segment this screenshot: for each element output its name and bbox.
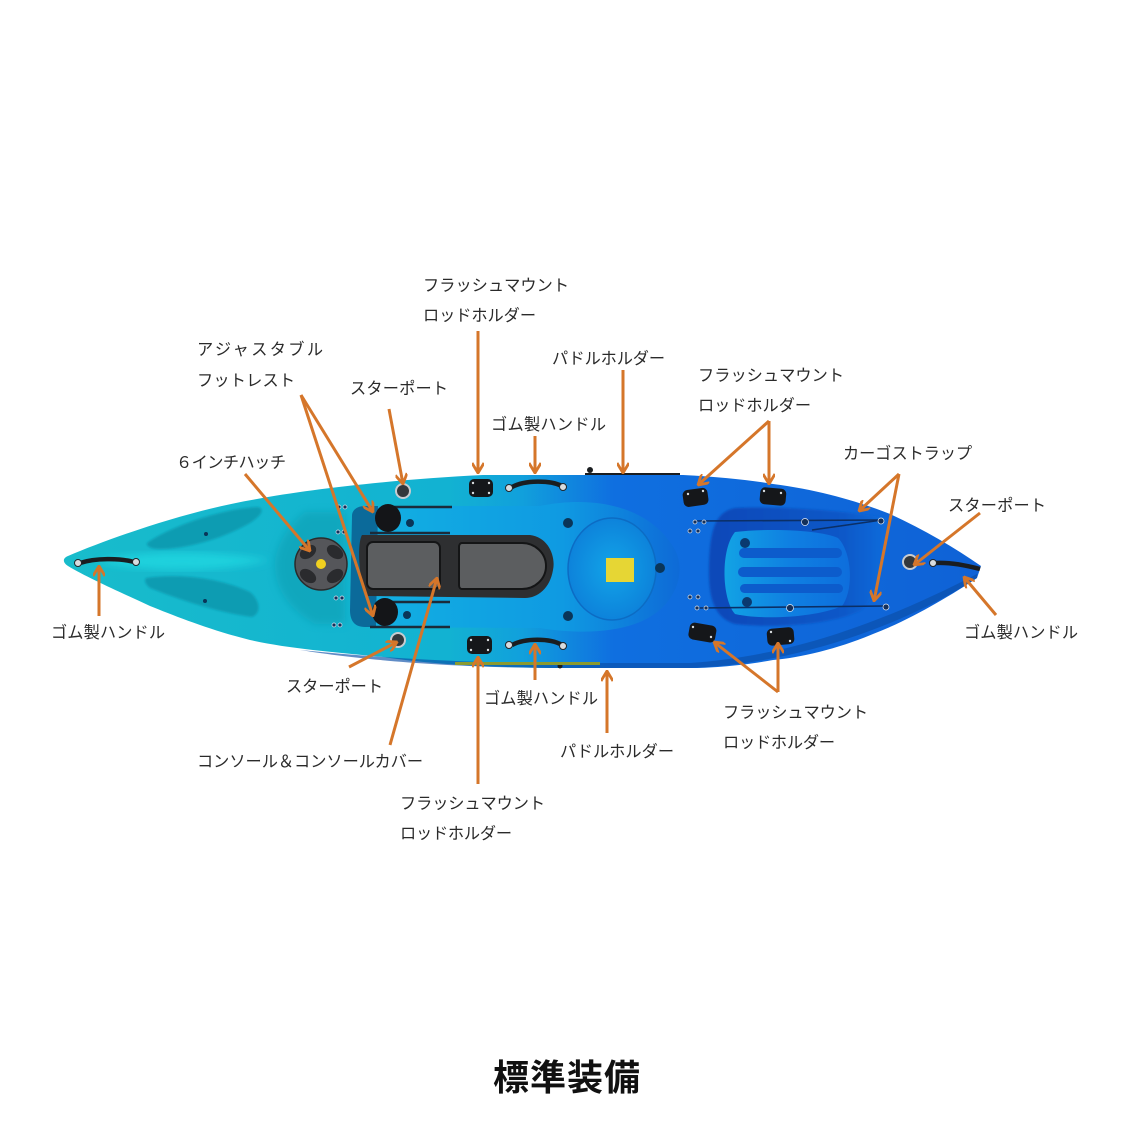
label: star port bottom: スターポート	[286, 678, 383, 696]
arrows: cargo strap	[859, 474, 899, 601]
arrow: stern star port	[914, 513, 980, 565]
arrows: rear top rod holders	[698, 421, 769, 485]
star ports	[391, 484, 917, 647]
label: flush mount rod holder rear top	[698, 367, 844, 415]
label: flush mount rod holder bottom	[400, 795, 545, 843]
kayak	[64, 467, 981, 668]
arrow: bottom star port	[349, 642, 397, 667]
label: flush mount rod holder top: フラッシュマウント	[423, 277, 569, 295]
scupper holes	[203, 518, 665, 621]
label: adjustable footrest	[197, 340, 323, 390]
arrow: stern handle	[964, 577, 996, 615]
label: flush mount rod holder bottom: フラッシュマウント	[400, 795, 545, 813]
console dark collar	[359, 535, 554, 598]
label: rubber handle top: ゴム製ハンドル	[491, 415, 606, 434]
warning label	[606, 558, 634, 582]
label: rubber handle stern: ゴム製ハンドル	[964, 623, 1078, 642]
hull	[64, 475, 981, 668]
labels	[51, 277, 1078, 843]
rear tankwell	[709, 507, 888, 626]
arrow: console	[390, 578, 437, 745]
label: flush mount rod holder rear bottom	[723, 704, 868, 752]
arrow: top paddle holder	[622, 370, 624, 473]
arrow: 6 inch hatch	[245, 474, 310, 551]
label: flush mount rod holder rear bottom: フラッシュマウント	[723, 704, 868, 722]
floor holes	[740, 538, 752, 607]
label: flush mount rod holder rear top: フラッシュマウント	[698, 367, 844, 385]
label: paddle holder top: パドルホルダー	[552, 350, 665, 368]
console lid left	[367, 542, 440, 589]
label: star port top: スターポート	[350, 380, 448, 398]
cockpit well	[350, 502, 680, 632]
arrow: top rod holder	[476, 331, 480, 473]
rubber handles	[80, 482, 980, 645]
label: flush mount rod holder top: ロッドホルダー	[423, 307, 536, 325]
centre hatch oval	[568, 518, 656, 620]
tankwell floor	[724, 530, 850, 617]
arrow: bottom rod holder	[476, 657, 480, 784]
arrows: footrests	[301, 395, 373, 616]
arrow: bottom handle	[534, 644, 536, 680]
floor ribs	[738, 548, 843, 593]
label: adjustable footrest: アジャスタブル	[197, 340, 323, 359]
bow recess bottom	[145, 576, 259, 617]
label: rubber handle bottom: ゴム製ハンドル	[484, 689, 598, 708]
console lid right	[459, 543, 546, 589]
label: rubber handle bow: ゴム製ハンドル	[51, 623, 165, 642]
label: star port stern: スターポート	[948, 497, 1046, 515]
label: adjustable footrest: フットレスト	[197, 372, 295, 390]
arrows: rear bottom rod holders	[714, 642, 778, 692]
rod holders	[467, 479, 795, 654]
label: paddle holder bottom: パドルホルダー	[560, 743, 674, 761]
bow recess top	[147, 507, 262, 549]
console rails	[370, 507, 452, 627]
label: flush mount rod holder bottom: ロッドホルダー	[400, 825, 512, 843]
label: flush mount rod holder top	[423, 277, 569, 325]
adjustable footrests	[372, 504, 401, 626]
title: 標準装備	[493, 1057, 640, 1098]
arrow: bow handle	[98, 566, 100, 616]
cargo straps	[695, 520, 886, 608]
strap anchors	[332, 505, 889, 627]
hatch surround shadow	[275, 512, 345, 624]
cockpit dark front wall	[350, 506, 378, 627]
paddle holder fittings	[455, 467, 680, 668]
bow deck highlight	[100, 552, 270, 570]
label: console and cover: コンソール＆コンソールカバー	[197, 753, 423, 771]
arrow: bottom paddle holder	[606, 671, 608, 733]
label: flush mount rod holder rear top: ロッドホルダー	[698, 397, 811, 415]
label: flush mount rod holder rear bottom: ロッドホルダー	[723, 734, 835, 752]
hull lower edge shading	[300, 574, 977, 668]
arrows	[99, 331, 996, 784]
handle fittings	[74, 484, 936, 650]
arrow: top star port	[389, 409, 403, 484]
6 inch hatch	[295, 538, 347, 590]
arrow: top handle	[534, 436, 536, 473]
label: 6 inch hatch: ６インチハッチ	[176, 454, 286, 472]
label: cargo strap: カーゴストラップ	[843, 444, 972, 463]
